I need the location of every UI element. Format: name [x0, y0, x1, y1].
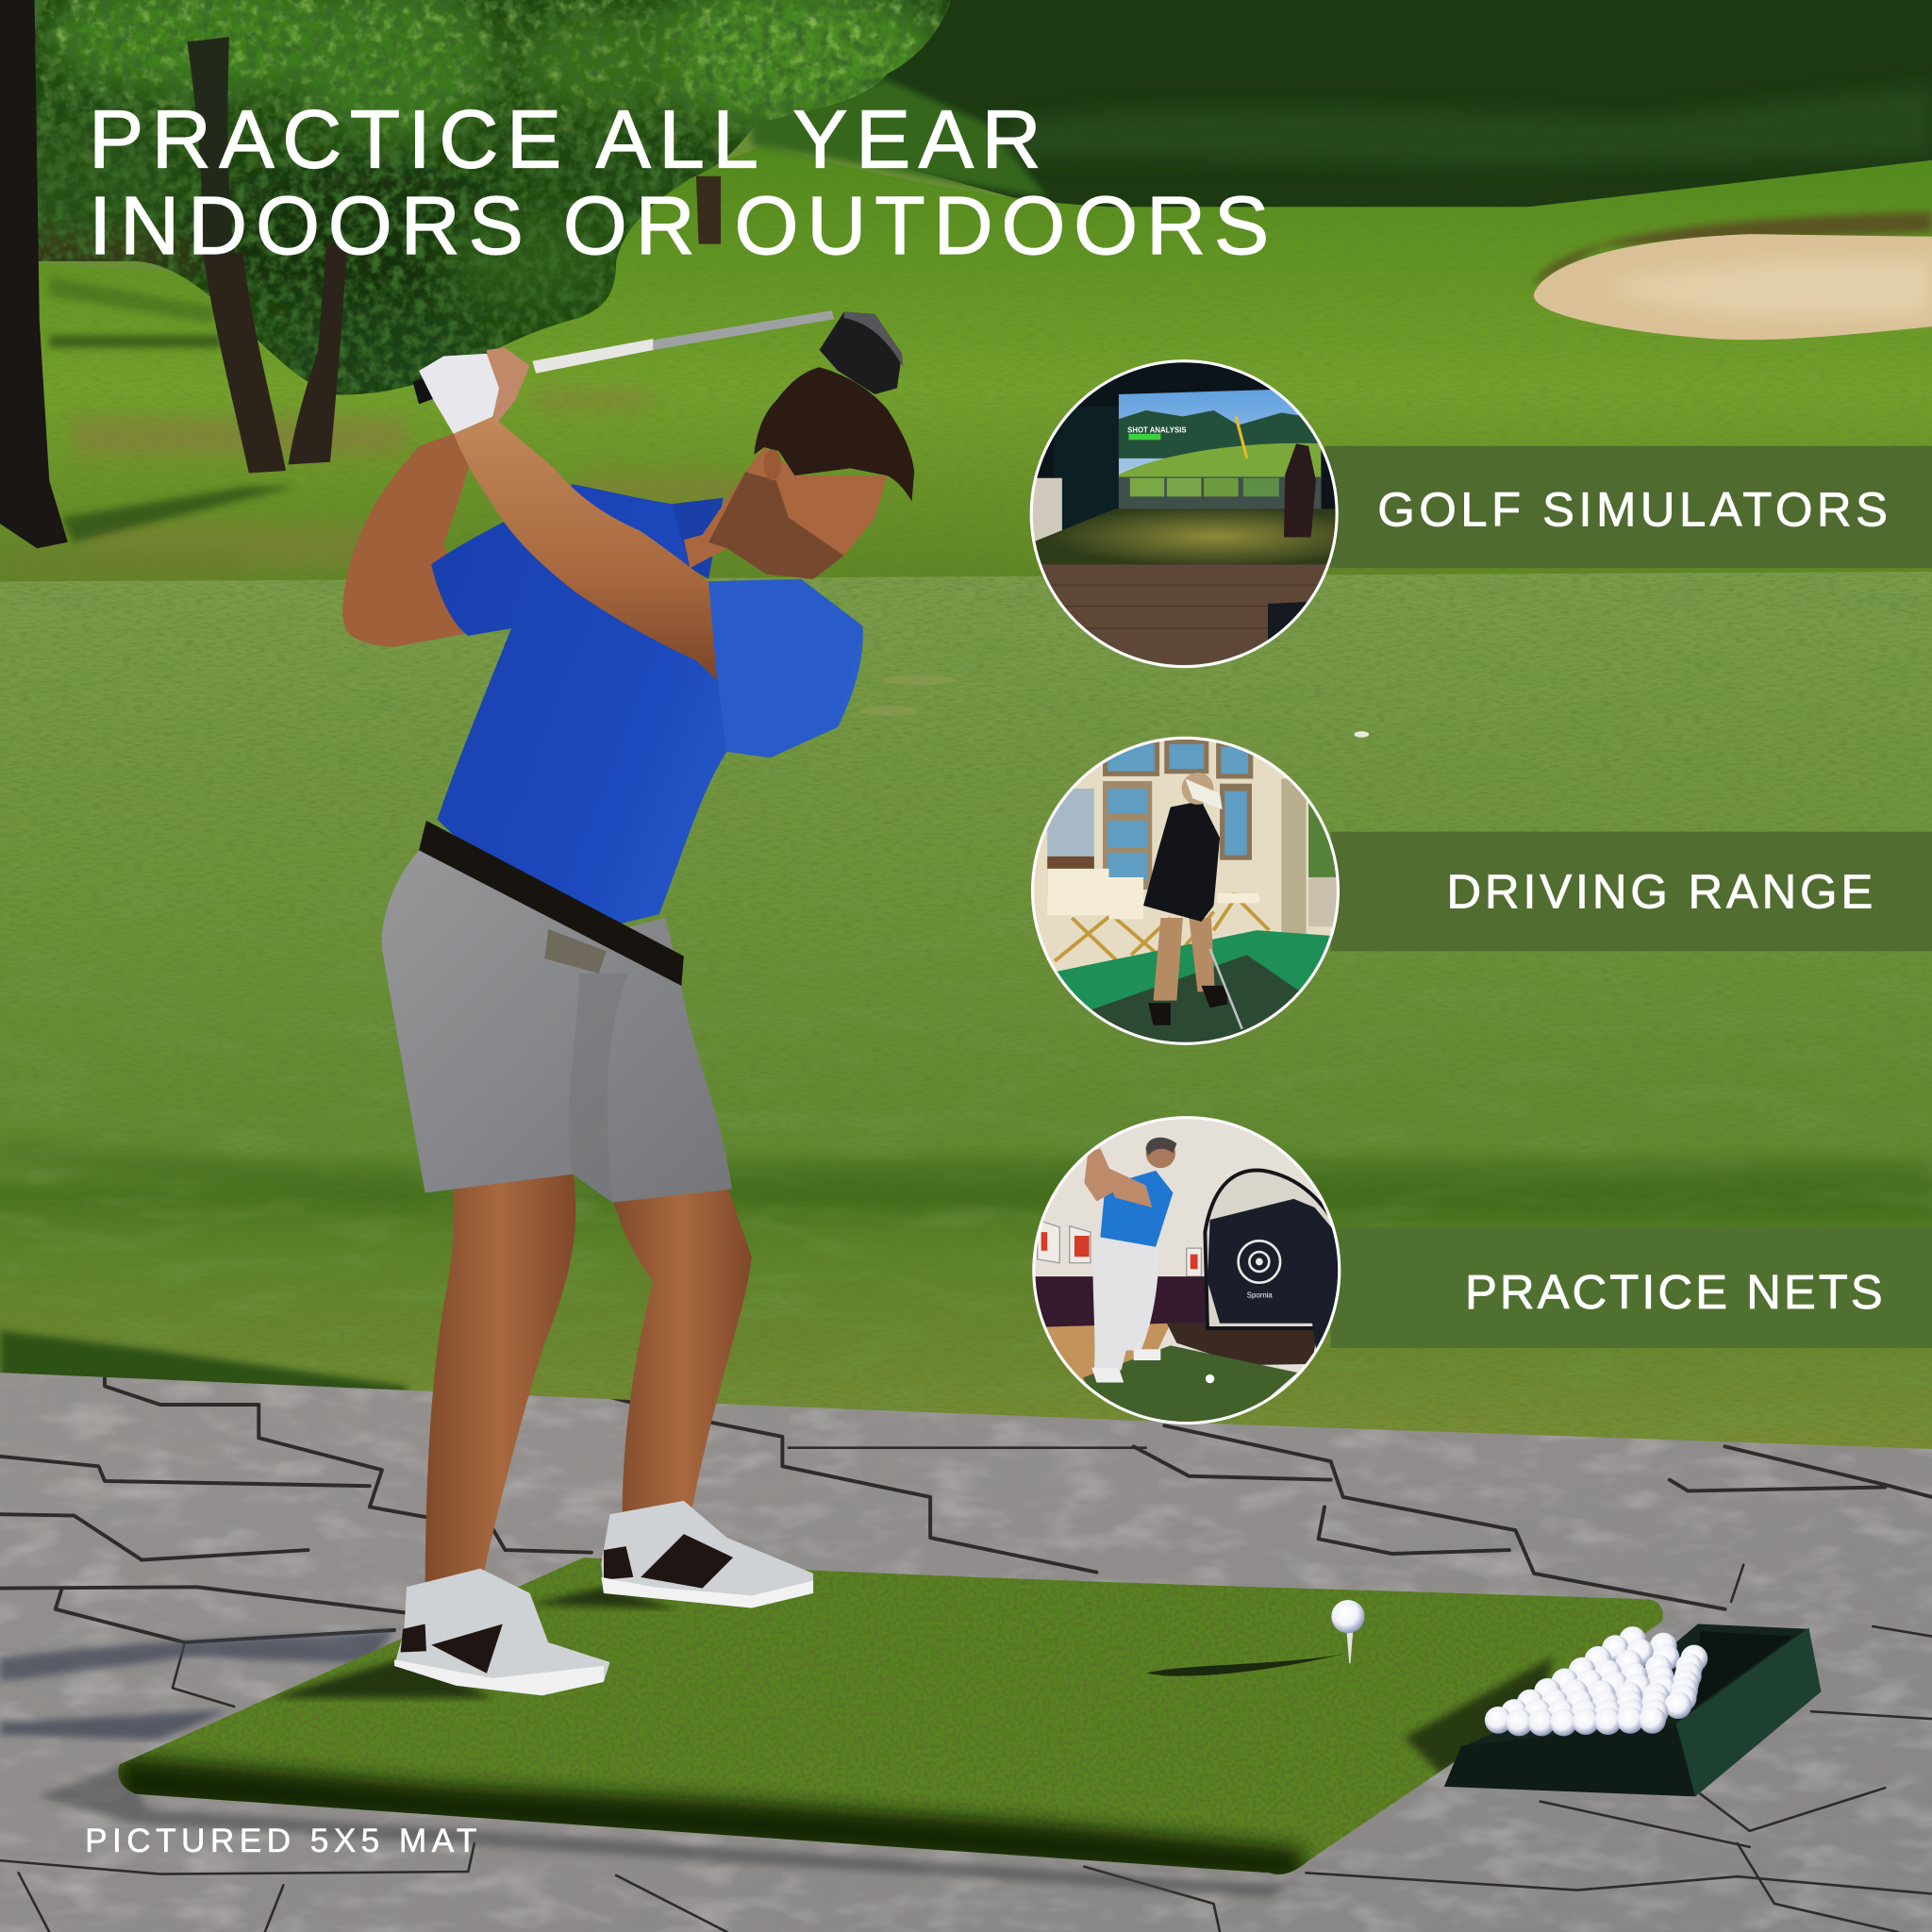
back leg: [425, 1171, 575, 1605]
back shoe: [601, 1501, 813, 1607]
practice net: [1205, 1171, 1343, 1349]
dark practice mat: [1072, 955, 1306, 1059]
range balls: [1485, 1626, 1707, 1736]
club grip: [413, 375, 439, 404]
tree canopy: [34, 0, 951, 394]
label band: practice nets: PRACTICE NETS: [1465, 1265, 1883, 1319]
shorts folds: [569, 974, 628, 1203]
shirt: [431, 484, 863, 930]
caption: PICTURED 5X5 MAT: [85, 1823, 476, 1859]
title: [89, 93, 1269, 272]
main grass: [0, 567, 1932, 1466]
club shaft: [536, 310, 834, 372]
background: golf course: [0, 0, 1932, 591]
fairway shadows: [49, 277, 295, 542]
shorts: [382, 844, 732, 1203]
door frame: [1281, 778, 1306, 939]
cabinet: [1033, 478, 1062, 544]
photo circle: golf simulator room: [1023, 358, 1343, 677]
monitor box: [1268, 601, 1319, 653]
front shoe: [394, 1569, 610, 1695]
neck and face: [684, 447, 887, 579]
label band: golf simulators: [1324, 446, 1932, 568]
belt: [419, 821, 684, 986]
simulator screen: SHOT ANALYSIS: [1127, 425, 1187, 434]
simulator screen: [1119, 388, 1321, 511]
label band: driving range: [1331, 832, 1932, 951]
label band: golf simulators: GOLF SIMULATORS: [1377, 483, 1888, 537]
large dark trunk: [0, 0, 68, 548]
green floor: [1035, 930, 1341, 1059]
stubble: [708, 472, 844, 579]
wall art: [1038, 1220, 1201, 1276]
stone patio: [0, 1368, 1932, 1932]
tee shadow: [1146, 1654, 1345, 1676]
golfer: [342, 310, 914, 1695]
dark hillside: [789, 0, 1932, 207]
back arm: [342, 434, 475, 647]
glove: [419, 354, 499, 434]
title: INDOORS OR OUTDOORS: [89, 179, 1269, 272]
man golfing: [1084, 1138, 1214, 1383]
club head: [820, 311, 903, 394]
label band: driving range: DRIVING RANGE: [1446, 865, 1873, 919]
curtain: [1054, 407, 1119, 536]
woman golfer: [1143, 773, 1242, 1029]
bare hand: [487, 347, 530, 425]
wood floor: [1041, 1324, 1171, 1386]
green mat: [1083, 1345, 1297, 1429]
turf mat: [111, 1553, 1675, 1885]
golf bag: [1284, 443, 1316, 537]
collar: [672, 498, 724, 579]
framed posters: [1047, 740, 1253, 896]
label band: practice nets: [1331, 1227, 1932, 1348]
brown turf patches: [0, 391, 740, 579]
golf ball on tee: [1331, 1600, 1365, 1663]
wood floor: [1041, 564, 1326, 665]
couch: [1033, 1276, 1208, 1329]
photo circle: practice net room: [1023, 1109, 1343, 1441]
chairs: [1055, 893, 1269, 967]
outdoor view: [1308, 801, 1345, 877]
club shaft white section: [532, 339, 653, 374]
tree trunks: [188, 37, 721, 474]
photo circle: driving range room: [1023, 727, 1345, 1059]
title: PRACTICE ALL YEAR: [89, 93, 1041, 186]
fairway slope: [0, 145, 1932, 587]
ear: [764, 448, 781, 480]
distant hedge: [752, 80, 1047, 197]
shirt sleeve shade: [699, 579, 862, 758]
practice net: Spornia: [1247, 1291, 1273, 1299]
front leg: [612, 1185, 752, 1518]
sand bunker: [1532, 212, 1932, 340]
hair: [754, 367, 914, 502]
front arm: [454, 416, 717, 680]
simulator floor: [1033, 508, 1337, 564]
ball tray: [1444, 1624, 1821, 1796]
belt buckle: [544, 929, 607, 974]
